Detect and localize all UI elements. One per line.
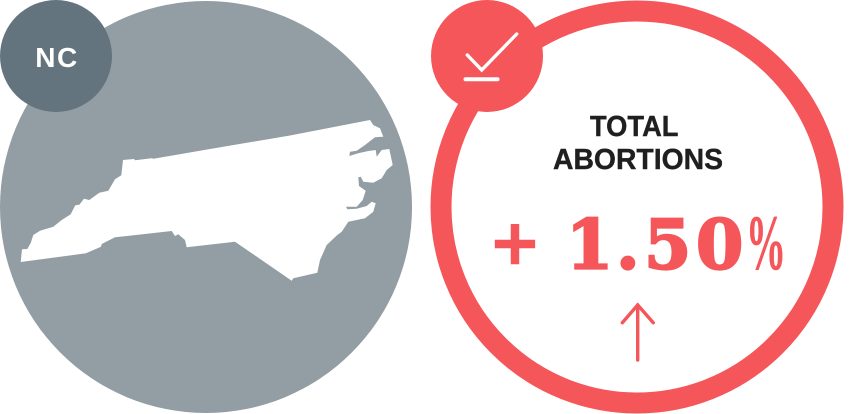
grey circle background [0, 1, 412, 413]
state panel: North Carolina [0, 0, 412, 413]
value: plus 1.50 percent: % [746, 199, 786, 286]
icon: check mark [467, 34, 517, 70]
icon: underline [466, 77, 498, 81]
value: plus 1.50 percent: 5 [644, 206, 691, 286]
map: North Carolina silhouette [21, 120, 393, 281]
arrow: up [622, 305, 653, 360]
statistic panel: total abortions [431, 0, 833, 403]
value: plus 1.50 percent: 1 [566, 206, 613, 286]
state badge [0, 0, 112, 112]
heading: TOTAL [590, 111, 678, 143]
red ring [441, 11, 833, 403]
value: plus 1.50 percent: 0 [696, 206, 743, 286]
value: plus 1.50 percent [489, 199, 786, 286]
value: plus 1.50 percent: + [489, 206, 541, 278]
check badge [431, 0, 543, 112]
state abbreviation: NC [35, 42, 79, 73]
value: plus 1.50 percent: . [616, 206, 640, 286]
heading: ABORTIONS [553, 144, 723, 176]
